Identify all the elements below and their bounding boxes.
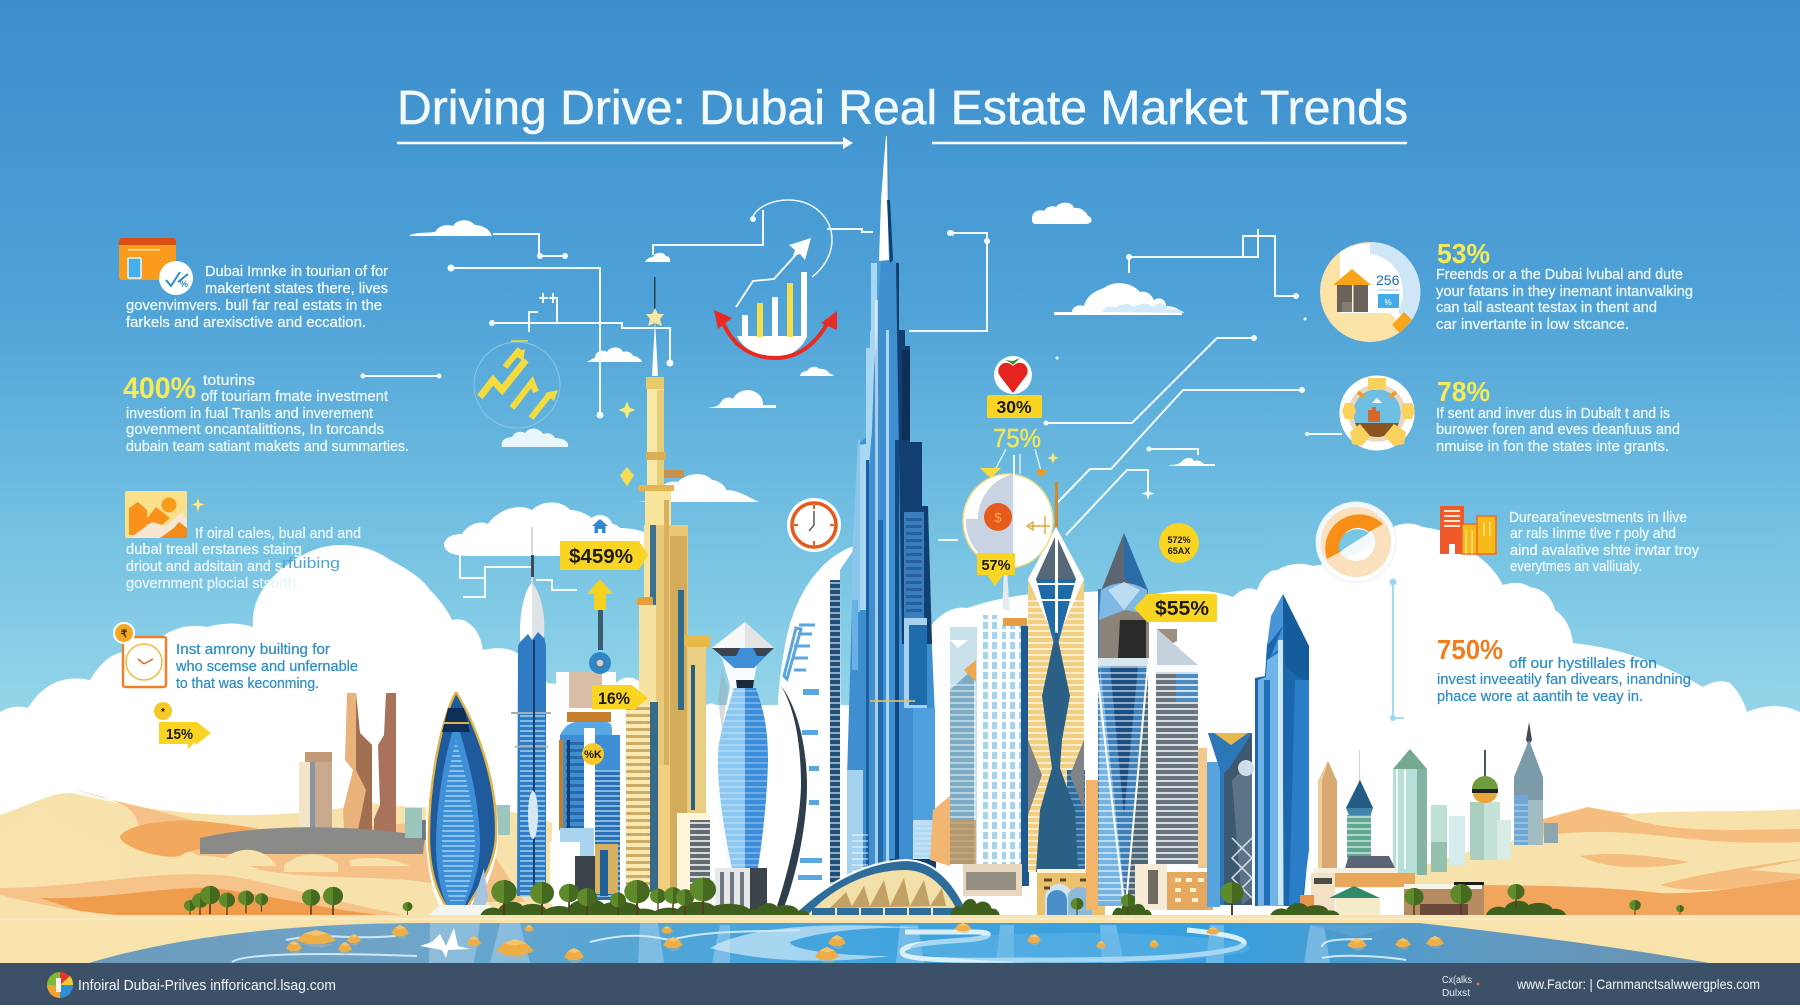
tag 15% — [154, 702, 211, 749]
panel: left column — [114, 238, 409, 749]
$459% callout — [560, 515, 648, 570]
text block: Dureara'inevestments in Ilive — [1509, 510, 1687, 526]
gold diamond tower — [1028, 482, 1085, 872]
stat 78% block: nmuise in fon the states inte grants. — [1436, 439, 1669, 455]
stat 400% block: govenment oncantalittions, In torcands — [126, 422, 384, 438]
rising pin with arrow — [587, 579, 613, 674]
footer logo — [47, 972, 73, 998]
stat 78% block — [1436, 376, 1680, 455]
16% tag: 16% — [598, 689, 630, 708]
sand shore — [0, 915, 1800, 965]
tag 15%: 15% — [166, 726, 193, 743]
icon: donut chart — [1316, 502, 1396, 582]
low waterfront buildings right — [1300, 856, 1484, 915]
stat 78% block: burower foren and eves deanfuus and — [1436, 422, 1680, 438]
icon: clock frame: ₹ — [121, 629, 128, 640]
text block 3: dubal treall erstanes staing — [126, 542, 302, 558]
stat 53% block: Freends or a the Dubai lvubal and dute — [1436, 267, 1683, 283]
stat 78% block: 78% — [1437, 376, 1490, 407]
stat 75%: 75% — [993, 423, 1041, 453]
text block: ar rals Iinme tlve r poly ahd — [1510, 526, 1676, 542]
Burj central tower — [847, 136, 936, 909]
stat 53% block: can tall asteant testax in thent and — [1436, 300, 1657, 316]
stat 750% block: invest inveeatily fan divears, inandning — [1437, 672, 1691, 688]
$55% callout: $55% — [1155, 598, 1209, 620]
$55% callout — [1134, 594, 1217, 622]
$459% callout: $459% — [569, 545, 633, 568]
text block 1: govenvimvers. bull far real estats in the — [126, 298, 382, 314]
text block — [1509, 510, 1700, 575]
stat 400% block: off touriam fmate investment — [201, 389, 388, 405]
icon: browser window with percent badge: % — [180, 279, 188, 289]
stat 53% block: car invertante in low stcance. — [1436, 317, 1629, 333]
panel: centre pie callouts — [963, 356, 1053, 586]
title: Driving Drive: Dubai Real Estate Market Trends — [397, 82, 1408, 135]
large cumulus cloud bank — [0, 524, 1800, 930]
panel: right column — [1316, 238, 1700, 721]
stat 400% block: 400% — [123, 372, 196, 405]
stat 750% block: off our hystillales fron — [1509, 656, 1657, 672]
text block 4: who scemse and unfernable — [175, 659, 358, 675]
tag 30% — [987, 395, 1042, 418]
text block 1: makertent states there, lives — [205, 281, 388, 297]
lagoon water — [89, 923, 1709, 963]
icon: browser window with percent badge — [119, 238, 193, 295]
% coin badge: %K — [584, 749, 602, 761]
text block 3: government plocial stsorth. — [126, 576, 300, 592]
text block: everytmes an valliualy. — [1510, 559, 1642, 575]
footer bar — [0, 963, 1800, 1005]
split arrows — [980, 449, 1047, 478]
tag 57% — [977, 553, 1015, 586]
sparkles — [618, 401, 1059, 486]
right skyline towers — [1318, 722, 1558, 881]
text block 1 — [126, 264, 388, 331]
zigzag arrow icon — [474, 341, 560, 428]
text block 1: farkels and arexisctive and eccation. — [126, 315, 366, 331]
tag 57%: 57% — [981, 558, 1011, 574]
sail tower — [426, 692, 500, 915]
connector dots — [360, 229, 1309, 500]
icon: house dial: 256 — [1376, 272, 1400, 288]
icon: ring emblem — [1342, 378, 1415, 446]
low arch building — [1037, 869, 1105, 918]
tag 15%: * — [161, 707, 165, 718]
connector lines — [363, 210, 1342, 597]
text block 3: rfuibing — [282, 556, 340, 572]
block tower with orange roof — [550, 672, 620, 904]
text block 3 — [126, 526, 361, 592]
footer left text: Infoiral Dubai-Prilves infforicancl.lsag.com — [78, 977, 336, 994]
stat 53% block: 53% — [1437, 238, 1490, 269]
dark pyramid tower — [1086, 533, 1149, 910]
16% tag — [592, 685, 648, 710]
stat 750% block: 750% — [1437, 634, 1503, 665]
dome arch — [790, 860, 970, 918]
dunes right — [1410, 807, 1800, 921]
coin badge 572%: 65AX — [1168, 546, 1190, 556]
text block: aind avalative shte irwtar troy — [1510, 543, 1700, 559]
text block 1: Dubai Imnke in tourian of for — [205, 264, 388, 280]
blue crystal tower — [1255, 594, 1309, 906]
footer small label: Cx(alks — [1442, 975, 1472, 986]
white sail building — [777, 545, 857, 910]
tree line — [184, 878, 1684, 917]
growth chart icon — [714, 200, 837, 358]
icon: clock frame — [114, 623, 166, 687]
stat 400% block: toturins — [203, 373, 255, 389]
white grid towers — [963, 570, 1029, 896]
dunes left — [0, 790, 552, 925]
icon: house dial: % — [1384, 298, 1392, 307]
needle tower — [511, 527, 551, 900]
Y-top tower — [1207, 733, 1254, 907]
pie chart: $ — [994, 510, 1002, 525]
vertical connector — [1390, 578, 1404, 721]
bulb tower — [712, 622, 774, 910]
stat 53% block — [1436, 238, 1693, 333]
coin badge 572%: 572% — [1167, 535, 1191, 545]
stat 750% block: phace wore at aantih te veay in. — [1437, 689, 1643, 705]
stat 400% block — [123, 372, 409, 455]
stat 78% block: If sent and inver dus in Dubalt t and is — [1436, 406, 1670, 422]
pie chart — [963, 455, 1053, 568]
icon: house dial — [1320, 242, 1420, 342]
% coin badge — [582, 743, 604, 765]
small far towers left — [200, 693, 510, 872]
grey striped tower — [1135, 629, 1213, 910]
footer small label — [1442, 975, 1480, 999]
gold tower group — [626, 277, 710, 896]
text block 4: Inst amrony builting for — [176, 642, 330, 658]
coin badge 572% — [1159, 523, 1199, 563]
icon: tomato heart — [994, 356, 1032, 394]
icon: buildings — [1440, 506, 1496, 554]
tag 30%: 30% — [996, 397, 1032, 417]
stepped teal tower — [930, 627, 977, 866]
stat 750% block — [1437, 634, 1691, 705]
stat 53% block: your fatans in they inemant intanvalking — [1436, 284, 1693, 300]
footer small label: Dulxst — [1442, 988, 1470, 999]
stat 400% block: dubain team satiant makets and summarties. — [126, 439, 409, 455]
clouds — [410, 203, 1215, 556]
icon: landscape picture — [125, 491, 204, 538]
text block 3: driout and adsitain and s — [126, 559, 282, 575]
text block 4: to that was keconming. — [176, 676, 319, 692]
footer right text: www.Factor: | Carnmanctsalwwergples.com — [1516, 976, 1760, 992]
text block 4 — [175, 642, 358, 692]
text block 3: If oiral cales, bual and and — [195, 526, 361, 542]
stat 400% block: investiom in fual Tranls and inverement — [126, 406, 373, 422]
clock icon — [787, 498, 841, 552]
